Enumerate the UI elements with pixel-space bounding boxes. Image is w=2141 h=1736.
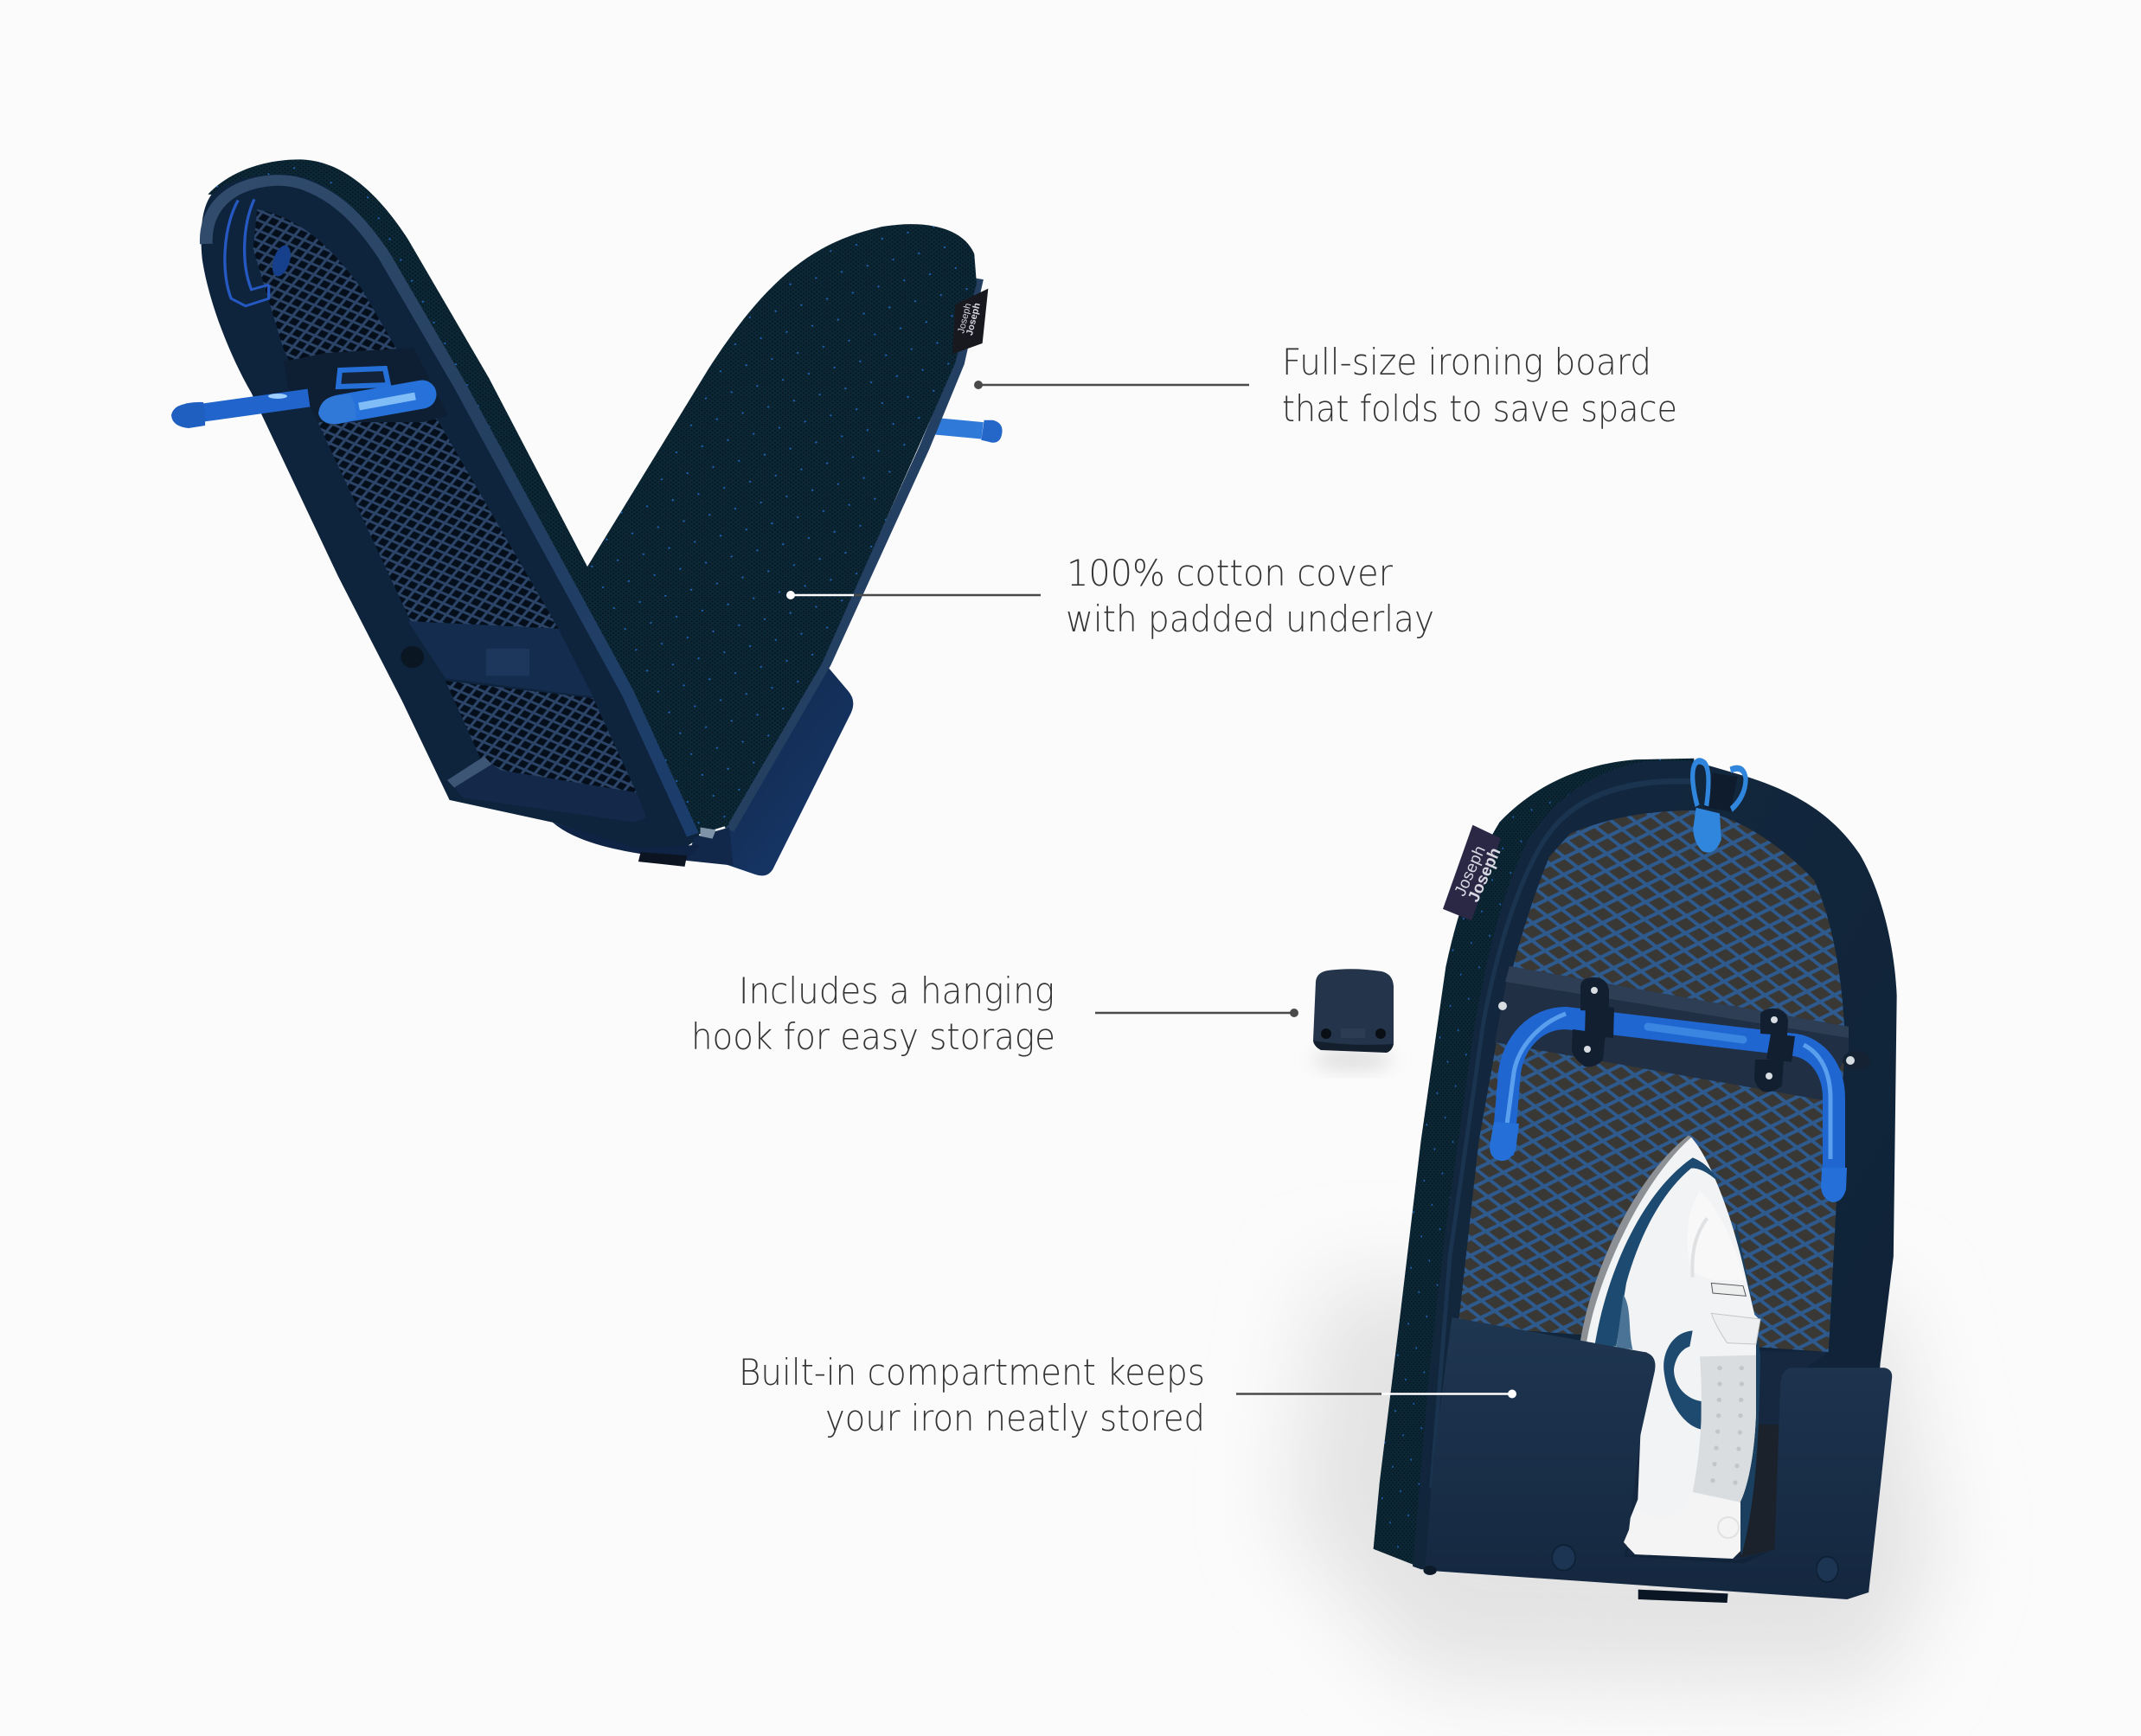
right strap xyxy=(1766,1034,1795,1062)
left screw xyxy=(1321,1028,1331,1039)
left board frame xyxy=(201,175,701,849)
lower pocket and frame details xyxy=(1423,761,1892,1603)
callout text: with padded underlay xyxy=(1066,598,1434,640)
bottom tab xyxy=(1638,1590,1728,1603)
left board mesh xyxy=(253,209,559,629)
base black tab xyxy=(638,852,687,867)
left screw xyxy=(1498,1002,1507,1010)
soleplate xyxy=(1580,1136,1693,1347)
hinge block xyxy=(686,827,734,866)
callout 4: built-in compartment xyxy=(739,1351,1516,1439)
leader line xyxy=(978,384,1249,386)
spray button xyxy=(1711,1313,1760,1344)
dot xyxy=(1290,1009,1298,1017)
screws xyxy=(1584,987,1778,1079)
dome highlight xyxy=(1688,1191,1746,1280)
steam slider xyxy=(1711,1283,1746,1296)
hinge xyxy=(701,827,716,839)
product: open folded ironing board xyxy=(201,159,1003,875)
cushion edge xyxy=(1374,759,1694,1569)
crossbar with embossed logo xyxy=(401,621,593,697)
left board rim highlight xyxy=(206,180,693,835)
upper left mount xyxy=(1580,977,1609,1012)
tube ridge xyxy=(1648,1027,1743,1040)
board drop shadow xyxy=(1289,1280,1938,1687)
callout text: that folds to save space xyxy=(1282,388,1677,430)
right board padded cover xyxy=(579,224,977,827)
brand tag text: Joseph xyxy=(1465,845,1505,905)
bar body xyxy=(1495,966,1849,1100)
lower right mount xyxy=(1754,1060,1784,1092)
left strap xyxy=(1585,1003,1614,1038)
lower recess xyxy=(454,758,646,823)
front leg tube xyxy=(339,394,422,409)
iron base over pocket xyxy=(1624,1494,1740,1559)
iron xyxy=(1580,1136,1760,1559)
lower mesh behind iron xyxy=(1740,1425,1783,1558)
label text on open board: Joseph xyxy=(965,302,983,336)
right screw xyxy=(1846,1056,1855,1065)
blue buckle xyxy=(338,368,388,387)
front leg cap xyxy=(318,394,356,424)
recess highlight xyxy=(447,756,491,788)
right board blue tube xyxy=(935,420,1003,443)
upper right mount xyxy=(1760,1009,1788,1035)
callout text: your iron neatly stored xyxy=(825,1397,1205,1439)
frame highlight xyxy=(1432,781,1694,1488)
leader line outside board xyxy=(1236,1393,1381,1395)
care label on cover xyxy=(952,289,988,354)
callout 1: full-size board xyxy=(974,341,1677,430)
leader line on board xyxy=(1381,1393,1512,1395)
leg bracket xyxy=(284,348,448,422)
callout 2: cotton cover xyxy=(786,552,1434,640)
grip dots xyxy=(1710,1366,1744,1485)
board frame xyxy=(1413,761,1897,1598)
tube xyxy=(1503,1018,1834,1185)
recess behind iron xyxy=(1628,1349,1829,1560)
callout text: Includes a hanging xyxy=(739,970,1054,1012)
ironing mesh xyxy=(1458,810,1845,1352)
blue fold-out leg xyxy=(1490,1014,1847,1202)
brand tag text: Joseph xyxy=(1452,843,1490,899)
plate body xyxy=(1313,969,1394,1051)
shell xyxy=(1586,1137,1760,1559)
leader line outside board xyxy=(854,594,1041,596)
left leg tube xyxy=(203,398,309,413)
right edge shadow xyxy=(1730,1220,1760,1555)
small foot xyxy=(1423,1566,1437,1575)
brand tag xyxy=(1443,825,1501,920)
callout text: Built-in compartment keeps xyxy=(739,1351,1205,1393)
dot xyxy=(1508,1389,1516,1398)
callout text: 100% cotton cover xyxy=(1067,552,1394,594)
blue band xyxy=(1594,1157,1720,1347)
callout 3: hanging hook xyxy=(691,970,1298,1058)
leg assembly on open board xyxy=(171,348,448,428)
leader line xyxy=(1095,1012,1294,1014)
leg mount bar xyxy=(1495,966,1870,1100)
leader line on board xyxy=(791,594,854,596)
base underside xyxy=(553,823,701,861)
pocket bumps xyxy=(1552,1545,1838,1582)
label text on open board: Joseph xyxy=(956,302,973,335)
hook plate xyxy=(1313,969,1394,1053)
product: folded board with iron xyxy=(1374,759,1897,1598)
embossed logo xyxy=(1341,1028,1365,1038)
light blue panel xyxy=(1616,1295,1632,1349)
right board rim xyxy=(729,279,978,830)
bar upper face xyxy=(1505,966,1849,1038)
blue loop ring xyxy=(1663,1330,1702,1430)
hanging strap xyxy=(225,199,294,306)
front tube highlight xyxy=(359,396,415,407)
hanging loop xyxy=(1693,761,1746,853)
left cap xyxy=(1490,1122,1519,1161)
iron temperature dial xyxy=(1718,1517,1739,1538)
right screw xyxy=(1375,1028,1386,1039)
left board cushion edge xyxy=(208,159,729,835)
grip xyxy=(1693,1355,1756,1502)
lower mesh xyxy=(446,681,637,792)
tube highlight left xyxy=(1507,1014,1566,1124)
dot xyxy=(786,591,795,599)
lower left mount xyxy=(1572,1029,1606,1067)
callout text: Full-size ironing board xyxy=(1282,341,1651,383)
front dial arc xyxy=(1692,1218,1707,1278)
hook plate shadow xyxy=(1313,1051,1393,1068)
dot xyxy=(974,381,983,389)
leg clips xyxy=(1572,977,1795,1092)
right screw mount xyxy=(1843,1051,1870,1070)
tube highlight right xyxy=(1804,1045,1830,1159)
right board hinge wedge xyxy=(686,663,853,875)
left leg cap xyxy=(171,402,205,428)
compartment front xyxy=(1425,1317,1892,1599)
plate bottom edge xyxy=(1313,1041,1394,1053)
right cap xyxy=(1821,1168,1847,1202)
tube highlight xyxy=(268,394,287,399)
callout text: hook for easy storage xyxy=(691,1015,1055,1058)
